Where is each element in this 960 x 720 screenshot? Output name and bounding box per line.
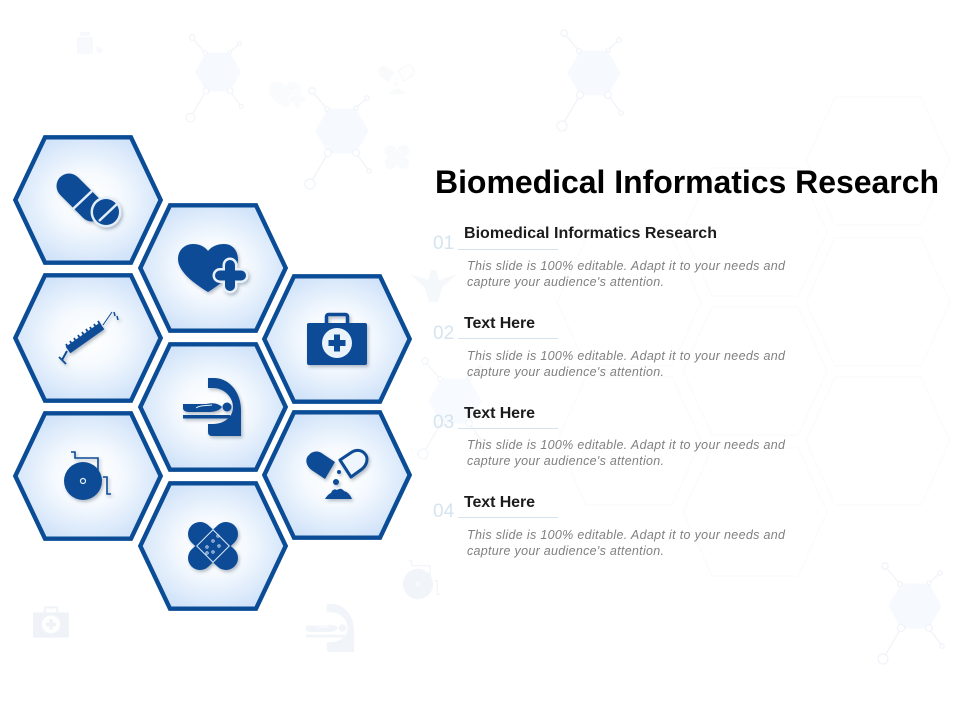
item 04 <box>433 494 786 558</box>
description 01: This slide is 100% editable. Adapt it to your needs and <box>467 259 786 273</box>
hexagon: syringe <box>15 275 161 401</box>
number 01: 01 <box>433 233 454 254</box>
description 02: This slide is 100% editable. Adapt it to your needs and <box>467 349 786 363</box>
background: faint medical icons <box>33 32 457 652</box>
hexagon: first aid kit <box>264 276 410 402</box>
background: faint molecules <box>186 30 944 664</box>
item 02 <box>433 315 786 379</box>
description 02: capture your audience's attention. <box>467 365 664 379</box>
number 02: 02 <box>433 323 454 344</box>
icon: crossed bandage <box>197 530 229 562</box>
icon: pills and powder <box>306 450 367 499</box>
description 03: capture your audience's attention. <box>467 454 664 468</box>
number 04: 04 <box>433 501 455 522</box>
title: Biomedical Informatics Research <box>435 164 939 200</box>
description 01: capture your audience's attention. <box>467 275 664 289</box>
heading 02: Text Here <box>464 315 535 332</box>
heading 01: Biomedical Informatics Research <box>464 225 717 242</box>
divider 04 <box>458 517 558 518</box>
item 03 <box>433 405 786 468</box>
hexagon: crossed bandage <box>140 483 286 609</box>
description 04: This slide is 100% editable. Adapt it to your needs and <box>467 528 786 542</box>
item 01 <box>433 225 786 289</box>
description 03: This slide is 100% editable. Adapt it to your needs and <box>467 438 786 452</box>
hexagon: pills and powder <box>264 412 410 538</box>
icon: wheelchair <box>64 452 111 500</box>
background: faint hexagon outlines <box>557 97 950 576</box>
heading 03: Text Here <box>464 405 535 422</box>
icon: capsule and tablet <box>69 186 122 228</box>
hexagon: heart with plus <box>140 205 286 331</box>
hexagon: wheelchair <box>15 413 161 539</box>
heading 04: Text Here <box>464 494 535 511</box>
hexagon: capsule and tablet <box>15 137 161 263</box>
divider 02 <box>458 338 558 339</box>
icon: heart with plus <box>178 244 241 292</box>
icon: syringe <box>59 312 118 364</box>
icon: first aid kit <box>307 314 367 365</box>
divider 03 <box>458 428 558 429</box>
number 03: 03 <box>433 412 454 433</box>
divider 01 <box>458 249 558 250</box>
description 04: capture your audience's attention. <box>467 544 664 558</box>
icon: medical scanner <box>183 378 241 436</box>
hexagon: medical scanner <box>140 344 286 470</box>
